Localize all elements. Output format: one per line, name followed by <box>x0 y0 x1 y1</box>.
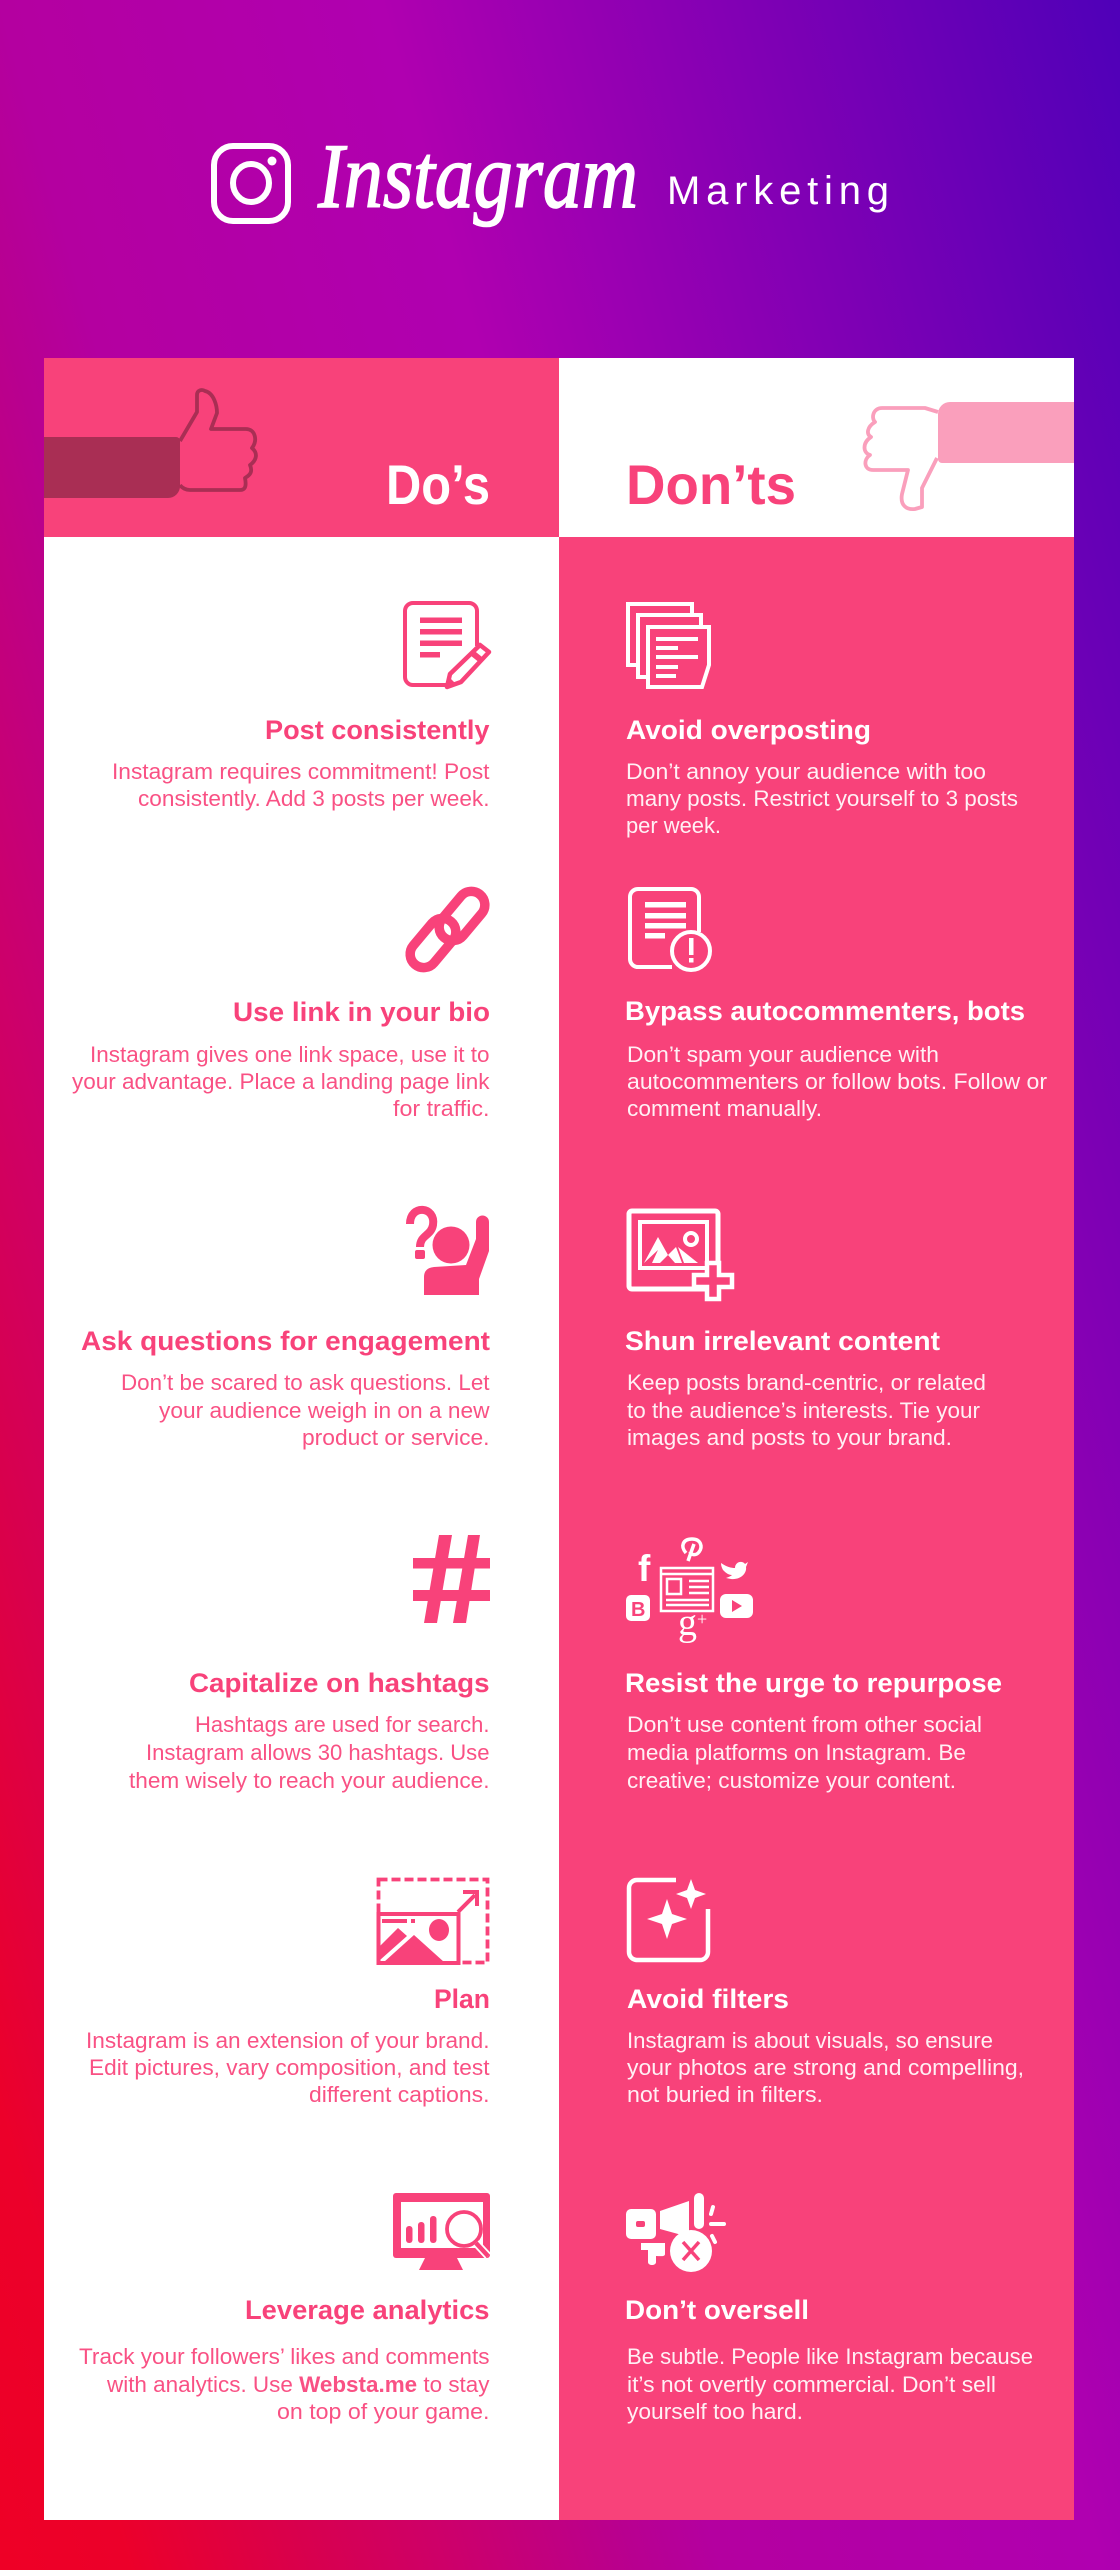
icon: social network logos around browser: g <box>678 1602 697 1644</box>
body text <box>627 2344 1033 2424</box>
body text: Be subtle. People like Instagram because <box>627 2344 1033 2369</box>
item: Plan <box>86 1880 490 2107</box>
body text: on top of your game. <box>277 2399 490 2424</box>
body text: with analytics. Use Websta.me to stay <box>106 2372 489 2397</box>
heading: Ask questions for engagement <box>81 1326 490 1356</box>
body text: per week. <box>626 813 721 838</box>
icon: social network logos around browser: + <box>697 1609 707 1629</box>
icon: Instagram logo <box>214 146 288 221</box>
item: Shun irrelevant content <box>625 1211 986 1450</box>
body text: product or service. <box>302 1425 490 1450</box>
icon: frame with sparkles <box>629 1879 708 1960</box>
body text: not buried in filters. <box>627 2082 823 2107</box>
body text: Hashtags are used for search. <box>195 1712 490 1737</box>
body text: Instagram is about visuals, so ensure <box>627 2028 993 2053</box>
icon: document with pencil <box>405 603 489 687</box>
body text <box>627 1712 982 1793</box>
item: Resist the urge to repurpose <box>625 1539 1002 1793</box>
body text: Instagram requires commitment! Post <box>112 759 490 784</box>
body text: images and posts to your brand. <box>627 1425 952 1450</box>
icon: social network logos around browser: B <box>631 1599 645 1621</box>
icon: monitor with magnifier <box>393 2193 490 2270</box>
body text: Don’t use content from other social <box>627 1712 982 1737</box>
heading: Use link in your bio <box>233 997 490 1027</box>
body text <box>129 1712 490 1793</box>
subtitle: Marketing: Marketing <box>667 169 889 213</box>
header: Don'ts <box>626 402 1074 516</box>
icon: stacked documents <box>628 604 709 687</box>
icon: thumbs up arm <box>44 390 256 498</box>
body text: many posts. Restrict yourself to 3 posts <box>626 786 1018 811</box>
icon: social network logos around browser <box>626 1539 753 1644</box>
item: Ask questions for engagement <box>81 1210 490 1450</box>
body text: Instagram gives one link space, use it to <box>90 1042 489 1067</box>
wordmark: Instagram: Instagram <box>317 125 638 227</box>
body text: Keep posts brand-centric, or related <box>627 1370 986 1395</box>
icon: document with alert <box>630 889 710 970</box>
heading: Bypass autocommenters, bots <box>625 996 1025 1026</box>
body text: different captions. <box>309 2082 490 2107</box>
item: Bypass autocommenters, bots <box>625 889 1047 1121</box>
body text: Edit pictures, vary composition, and test <box>89 2055 490 2080</box>
body text <box>627 1042 1047 1121</box>
item: Don't oversell <box>625 2193 1033 2424</box>
heading: Post consistently <box>265 715 490 745</box>
body text: Don’t spam your audience with <box>627 1042 939 1067</box>
item: Avoid filters <box>627 1879 1024 2107</box>
heading: Do's: Do’s <box>386 453 490 516</box>
heading: Leverage analytics <box>245 2295 490 2325</box>
body text: your advantage. Place a landing page link <box>72 1069 491 1094</box>
icon: thumbs down arm <box>864 402 1074 509</box>
body text: yourself too hard. <box>627 2399 803 2424</box>
body text <box>627 1370 986 1450</box>
body text <box>86 2028 490 2107</box>
body text <box>79 2344 490 2424</box>
body text: them wisely to reach your audience. <box>129 1768 490 1793</box>
item: Post consistently <box>112 603 490 811</box>
body text: Track your followers’ likes and comments <box>79 2344 490 2369</box>
icon: raised hand with question mark <box>410 1210 489 1295</box>
heading: Plan <box>434 1984 490 2014</box>
heading: Resist the urge to repurpose <box>625 1668 1002 1698</box>
item: Use link in your bio <box>72 886 491 1121</box>
heading: Don'ts: Don’ts <box>626 453 796 516</box>
body text: it’s not overtly commercial. Don’t sell <box>627 2372 996 2397</box>
item: Avoid overposting <box>626 604 1018 838</box>
body text <box>626 759 1018 838</box>
body text <box>112 759 490 811</box>
body text: for traffic. <box>393 1096 490 1121</box>
body text <box>627 2028 1024 2107</box>
body text: to the audience’s interests. Tie your <box>627 1398 980 1423</box>
heading: Avoid overposting <box>626 715 871 745</box>
heading: Avoid filters <box>627 1984 789 2014</box>
icon: megaphone with cross <box>626 2193 724 2272</box>
body text: Don’t be scared to ask questions. Let <box>121 1370 490 1395</box>
icon: chain link <box>405 886 490 973</box>
icon: hashtag <box>413 1535 490 1623</box>
body text: consistently. Add 3 posts per week. <box>138 786 490 811</box>
body text: Instagram is an extension of your brand. <box>86 2028 490 2053</box>
icon: image resize <box>378 1880 488 1963</box>
body text: comment manually. <box>627 1096 822 1121</box>
body text <box>121 1370 490 1450</box>
heading: Capitalize on hashtags <box>189 1668 490 1698</box>
icon: social network logos around browser: f <box>638 1548 651 1589</box>
body text: creative; customize your content. <box>627 1768 956 1793</box>
body text: Don’t annoy your audience with too <box>626 759 986 784</box>
item: Capitalize on hashtags <box>129 1535 490 1793</box>
icon: image with plus <box>629 1211 732 1299</box>
item: Leverage analytics <box>79 2193 490 2424</box>
panel: comparison table <box>44 358 1074 2520</box>
heading: Shun irrelevant content <box>625 1326 940 1356</box>
body text <box>72 1042 491 1121</box>
body text: autocommenters or follow bots. Follow or <box>627 1069 1047 1094</box>
heading: Don’t oversell <box>625 2295 809 2325</box>
title: Instagram Marketing <box>214 125 889 227</box>
body text: media platforms on Instagram. Be <box>627 1740 966 1765</box>
body text: Instagram allows 30 hashtags. Use <box>146 1740 490 1765</box>
header: Do's <box>44 390 490 516</box>
body text: your audience weigh in on a new <box>159 1398 490 1423</box>
body text: your photos are strong and compelling, <box>627 2055 1024 2080</box>
